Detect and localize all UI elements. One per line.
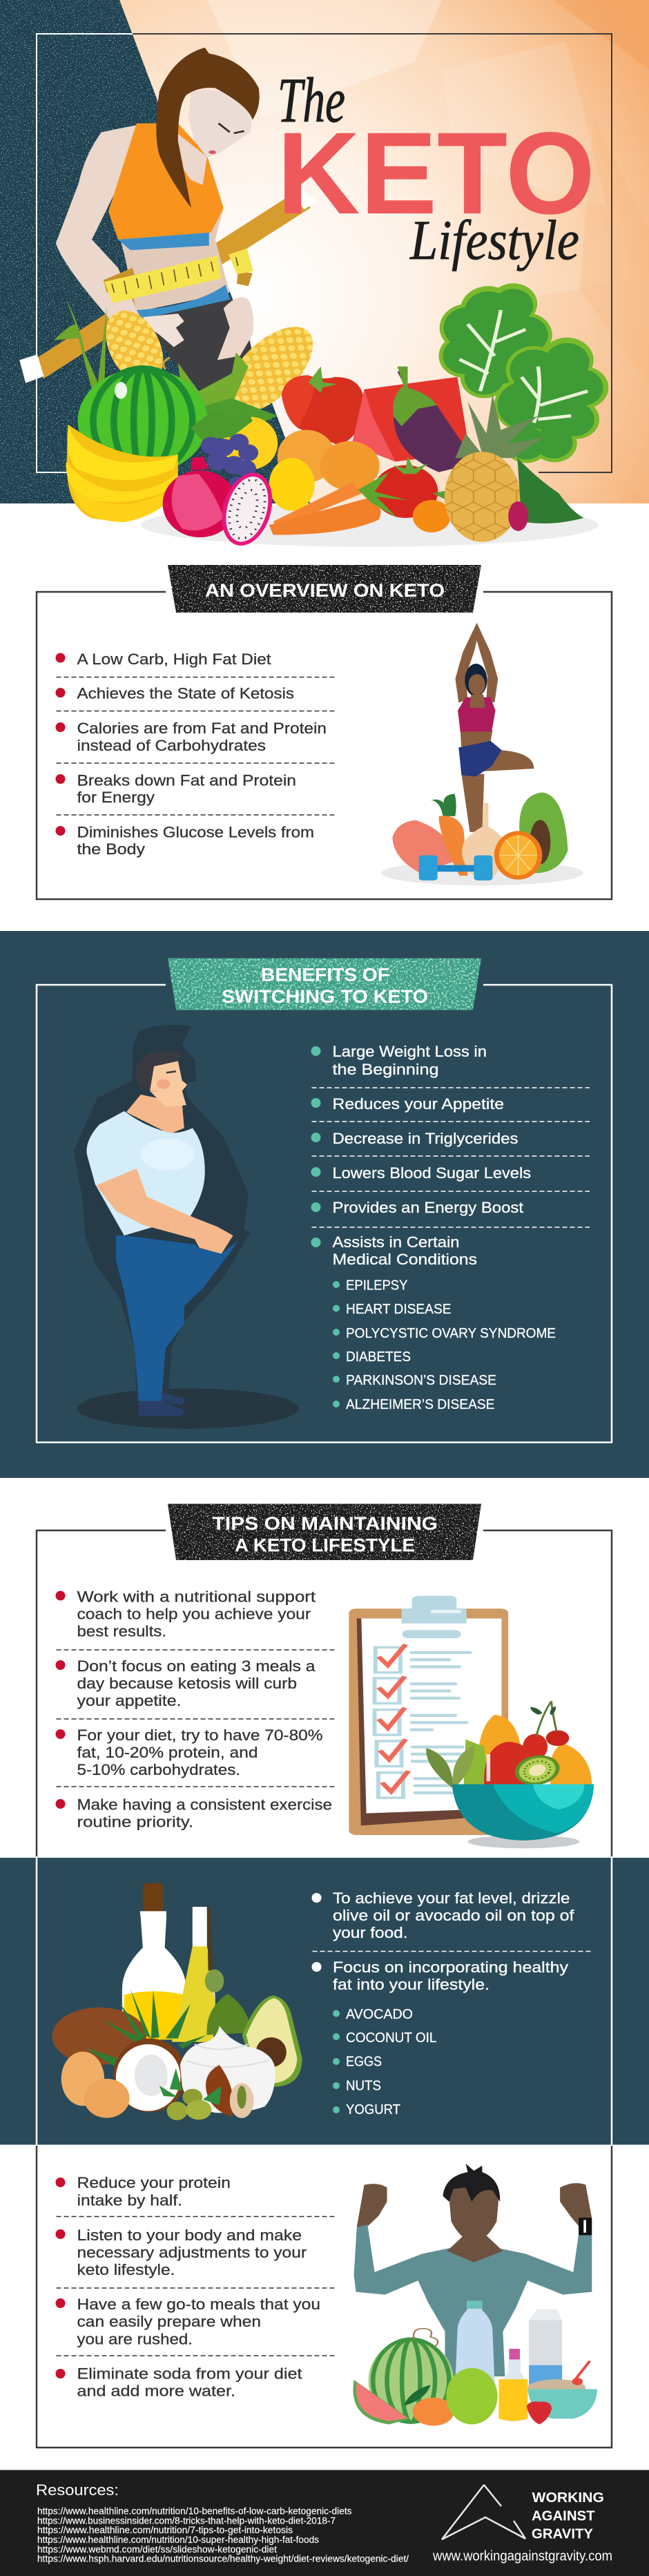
title: The Keto Lifestyle: The	[278, 65, 345, 135]
sub-list: conditions: ALZHEIMER’S DISEASE	[346, 1397, 494, 1412]
item: go-to meals	[55, 2296, 320, 2348]
overview list	[55, 651, 334, 858]
panel: overview	[37, 565, 612, 899]
item: appetite: Reduces your Appetite	[333, 1095, 504, 1113]
item: exercise: Make having a consistent exercise	[77, 1796, 332, 1814]
heading: an overview on keto	[168, 565, 481, 613]
sub-list: conditions	[333, 1278, 556, 1412]
item: coach: coach to help you achieve your	[77, 1605, 311, 1623]
item: drizzle oil: olive oil or avocado oil on top of	[333, 1907, 574, 1924]
item: triglycerides: Decrease in Triglycerides	[333, 1130, 518, 1147]
item: weight loss	[311, 1043, 487, 1078]
item: soda: and add more water.	[77, 2383, 235, 2399]
illustration: woman with measuring tape	[19, 48, 317, 394]
item: healthy fat	[312, 1959, 568, 1993]
item: breaks down: Breaks down Fat and Protein	[77, 772, 296, 789]
sub-list: fats: AVOCADO	[346, 2007, 413, 2022]
heading: benefits of switching to keto: SWITCHING TO KETO	[222, 986, 428, 1007]
item: go-to meals: can easily prepare when	[77, 2313, 261, 2330]
item: blood sugar: Lowers Blood Sugar Levels	[333, 1164, 531, 1182]
item: soda	[55, 2365, 302, 2399]
title: The Keto Lifestyle: Lifestyle	[409, 209, 579, 271]
item: listen: Listen to your body and make	[77, 2227, 302, 2244]
item: breaks down	[55, 772, 296, 806]
resource links: https://www.webmd.com/diet/ss/slideshow-ketogenic-diet	[37, 2544, 277, 2555]
panel: benefits	[0, 931, 649, 1478]
sub-list: fats	[333, 2007, 436, 2117]
sub-list: fats: EGGS	[346, 2054, 382, 2069]
item: go-to meals: you are rushed.	[77, 2330, 193, 2348]
overview frame	[37, 592, 612, 899]
item: protein: intake by half.	[77, 2192, 182, 2209]
item: meals: Don’t focus on eating 3 meals a	[77, 1657, 316, 1675]
item: coach: best results.	[77, 1623, 166, 1640]
resource links: https://www.healthline.com/nutrition/10-benefits-of-low-carb-ketogenic-diets	[37, 2506, 352, 2517]
item: listen: necessary adjustments to your	[77, 2244, 307, 2261]
heading: an overview on keto: AN OVERVIEW ON KETO	[205, 580, 445, 601]
sub-list: conditions: PARKINSON’S DISEASE	[346, 1373, 496, 1388]
item: medical conditions	[311, 1233, 477, 1268]
logo: working against gravity: GRAVITY	[532, 2526, 594, 2541]
benefits band	[0, 931, 649, 1478]
benefits list	[311, 1043, 590, 1412]
item: glucose: the Body	[77, 840, 145, 858]
resource links: https://www.healthline.com/nutrition/7-tips-to-get-into-ketosis	[37, 2525, 293, 2535]
item: protein	[55, 2174, 231, 2209]
item: go-to meals: Have a few go-to meals that you	[77, 2296, 320, 2313]
heading: tips on maintaining a keto lifestyle: A KETO LIFESTYLE	[235, 1535, 415, 1555]
panel: tips	[0, 1504, 649, 2448]
sub-list: conditions: POLYCYSTIC OVARY SYNDROME	[346, 1326, 556, 1341]
item: listen	[55, 2227, 307, 2278]
item: low carb: A Low Carb, High Fat Diet	[77, 651, 271, 668]
item: healthy fat: Focus on incorporating healthy	[333, 1959, 568, 1976]
logo: working against gravity: AGAINST	[532, 2508, 595, 2524]
item: ketosis: Achieves the State of Ketosis	[77, 685, 294, 702]
resource links	[37, 2506, 409, 2564]
panel: footer	[0, 2470, 649, 2576]
item: breaks down: for Energy	[77, 789, 155, 806]
hero frame	[37, 34, 612, 472]
heading: tips on maintaining a keto lifestyle	[168, 1504, 481, 1560]
title: The Keto Lifestyle	[277, 65, 595, 271]
item: meals: day because ketosis will curb	[77, 1675, 297, 1692]
sub-list: conditions: DIABETES	[346, 1349, 411, 1365]
item: calories: Calories are from Fat and Protein	[77, 720, 327, 737]
resource links: https://www.healthline.com/nutrition/10-super-healthy-high-fat-foods	[37, 2535, 319, 2545]
resource links: https://www.hsph.harvard.edu/nutritionsource/healthy-weight/diet-reviews/ketogenic-diet/	[37, 2554, 409, 2564]
item: macros: For your diet, try to have 70-80%	[77, 1727, 323, 1744]
item: calories: instead of Carbohydrates	[77, 737, 266, 754]
item: glucose: Diminishes Glucose Levels from	[77, 823, 314, 841]
sub-list: conditions: HEART DISEASE	[346, 1302, 452, 1317]
illustration: slimmed man holding out loose jeans	[74, 1025, 299, 1429]
item: meals: your appetite.	[77, 1692, 181, 1709]
item: weight loss: the Beginning	[333, 1061, 439, 1078]
item: energy: Provides an Energy Boost	[333, 1199, 523, 1216]
hero background facets	[0, 0, 649, 503]
item: coach: Work with a nutritional support	[77, 1588, 316, 1605]
item: medical conditions: Medical Conditions	[333, 1251, 477, 1268]
illustration: checklist and fruit bowl	[349, 1596, 594, 1848]
heading: benefits of switching to keto	[168, 959, 481, 1010]
item: soda: Eliminate soda from your diet	[77, 2365, 302, 2383]
item: calories	[55, 720, 327, 754]
sub-list: fats: YOGURT	[346, 2102, 400, 2117]
resources heading: Resources:	[36, 2481, 119, 2499]
website address: www.workingagainstgravity.com	[432, 2548, 612, 2564]
illustration: yoga woman with healthy food	[381, 623, 583, 885]
item: drizzle oil: your food.	[333, 1924, 407, 1941]
item: glucose	[55, 823, 314, 858]
sub-list: conditions: EPILEPSY	[346, 1278, 407, 1293]
illustration: oils, coconut, avocado, eggs and yogurt	[52, 1883, 302, 2120]
illustration: pile of fruit and vegetables	[54, 283, 608, 550]
item: protein: Reduce your protein	[77, 2174, 231, 2191]
sub-list: fats: COCONUT OIL	[346, 2030, 436, 2046]
band: healthy fats	[0, 1856, 649, 2146]
resource links: https://www.businessinsider.com/8-tricks-that-help-with-keto-diet-2018-7	[37, 2515, 336, 2526]
benefits frame	[37, 985, 612, 1442]
item: listen: keto lifestyle.	[77, 2261, 175, 2278]
item: medical conditions: Assists in Certain	[333, 1233, 460, 1251]
tips list: part two	[55, 2174, 334, 2399]
heading: tips on maintaining a keto lifestyle: TIPS ON MAINTAINING	[213, 1513, 438, 1534]
logo: working against gravity	[442, 2485, 604, 2541]
logo: working against gravity: WORKING	[532, 2490, 604, 2506]
item: macros: 5-10% carbohydrates.	[77, 1761, 240, 1778]
item: exercise	[55, 1796, 332, 1830]
title: The Keto Lifestyle: KETO	[277, 108, 595, 238]
item: coach	[55, 1588, 316, 1640]
item: exercise: routine priority.	[77, 1814, 193, 1830]
item: weight loss: Large Weight Loss in	[333, 1043, 487, 1060]
item: drizzle oil	[312, 1890, 574, 1941]
textured dark wedge	[0, 0, 310, 503]
sub-list: fats: NUTS	[346, 2079, 381, 2094]
item: meals	[55, 1657, 316, 1709]
item: macros	[55, 1727, 323, 1778]
heading: benefits of switching to keto: BENEFITS OF	[261, 964, 389, 985]
item: macros: fat, 10-20% protein, and	[77, 1744, 258, 1761]
fat list	[312, 1890, 591, 2117]
panel: hero	[0, 0, 649, 550]
tips frame	[37, 1530, 612, 2448]
item: drizzle oil: To achieve your fat level, drizzle	[333, 1890, 570, 1907]
item: healthy fat: fat into your lifestyle.	[333, 1976, 490, 1993]
tips list: part one	[55, 1588, 334, 1830]
illustration: muscular man with healthy groceries	[353, 2164, 597, 2425]
